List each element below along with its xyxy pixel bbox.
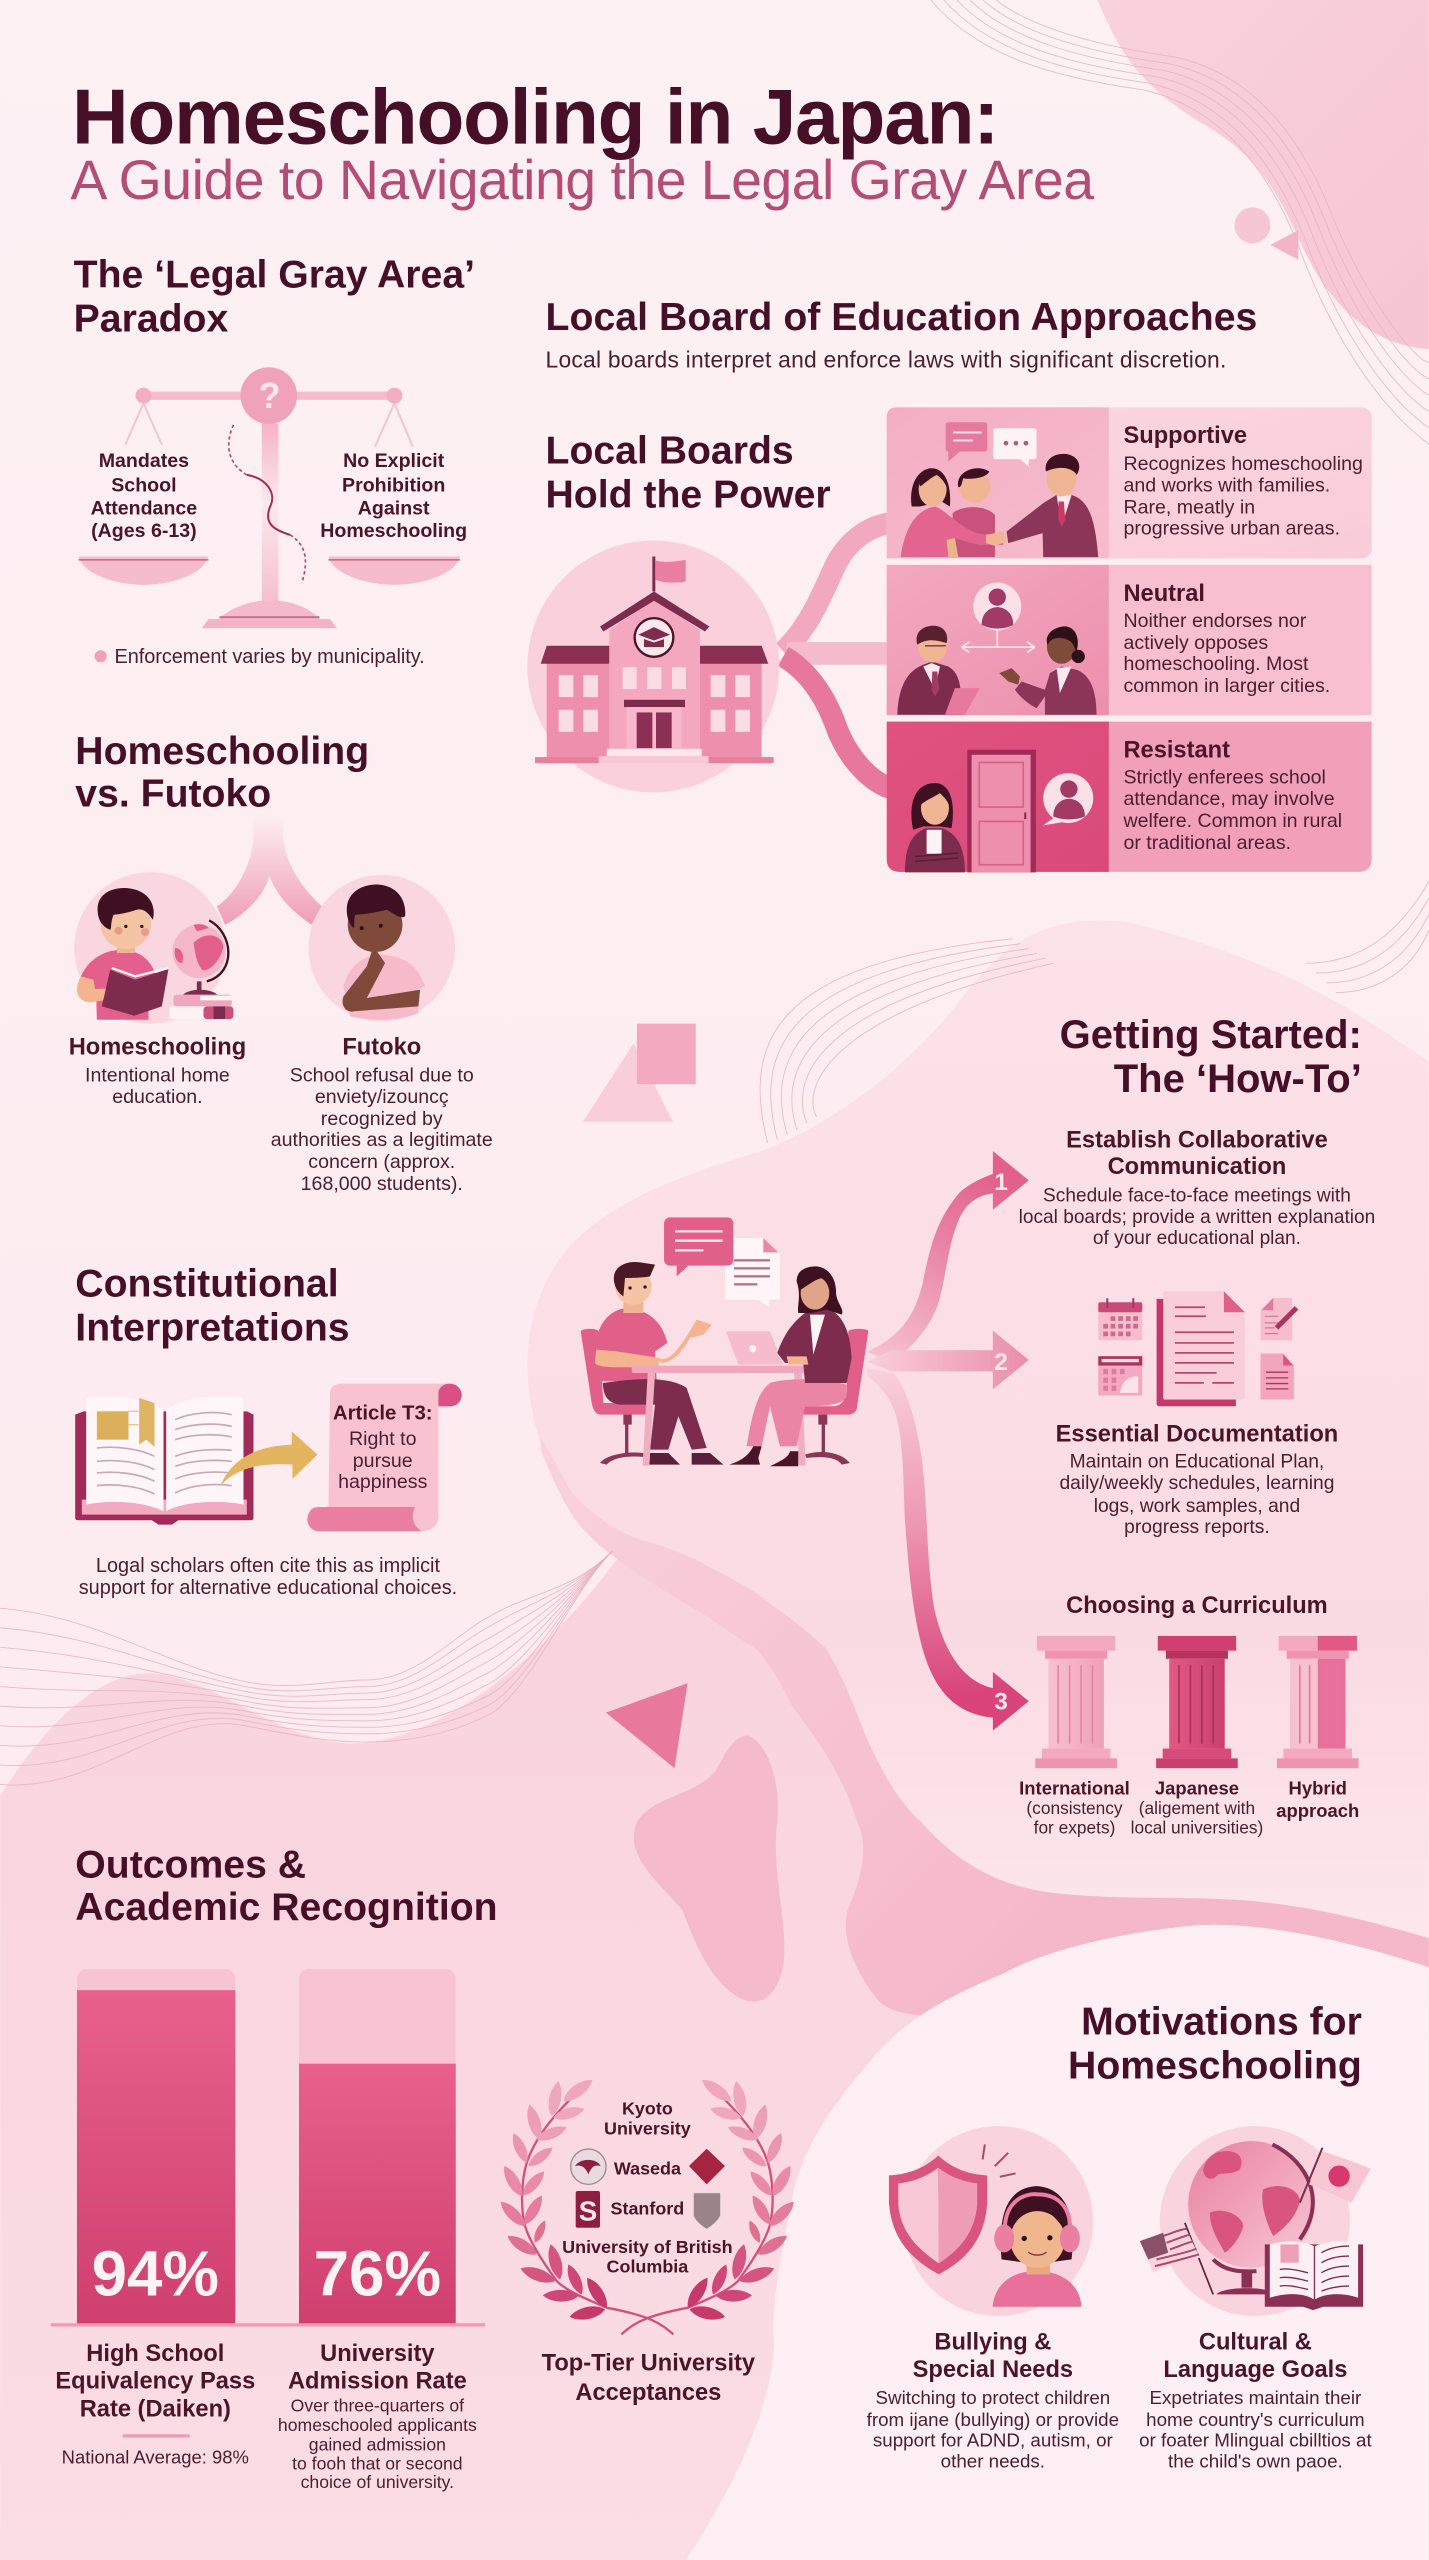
label: homeschooling: Homeschooling	[69, 1035, 246, 1061]
bar: high school equivalency 94%: 94%	[92, 2239, 219, 2310]
subheading text: Local boards interpret and enforce laws with significant discretion.	[546, 346, 1226, 372]
icon: shield and child with headphones	[889, 2126, 1093, 2316]
background: motivations white blob	[686, 1925, 1429, 2560]
text: neutral: Neutral	[1123, 581, 1205, 607]
text: scholars note: support for alternative educational choices.	[79, 1577, 457, 1599]
step 2 text: logs, work samples, and	[1094, 1496, 1300, 1517]
label: hybrid: Hybrid	[1289, 1777, 1347, 1798]
label: admission rate: gained admission	[309, 2435, 446, 2455]
panel: local board of education approaches	[527, 296, 1372, 872]
logo: shield	[693, 2193, 721, 2229]
label: equivalency pass rate: Rate (Daiken)	[80, 2396, 231, 2422]
label: japanese: Japanese	[1155, 1777, 1239, 1798]
pillar: international	[1035, 1636, 1117, 1768]
label: admission rate: to fooh that or second	[292, 2453, 463, 2473]
decorative shapes: circle and triangle	[1234, 207, 1298, 260]
note: enforcement: Enforcement varies by municipality.	[115, 646, 425, 668]
label: international: International	[1019, 1777, 1130, 1798]
label: hybrid: approach	[1276, 1800, 1359, 1821]
label: mandates: (Ages 6-13)	[91, 520, 197, 542]
scroll text: pursue	[353, 1450, 413, 1472]
heading: vs. Futoko	[75, 773, 271, 816]
label: futoko: authorities as a legitimate	[271, 1129, 493, 1151]
step 1 text: Schedule face-to-face meetings with	[1043, 1186, 1351, 1207]
arrow 1	[867, 1151, 1029, 1362]
label: admission rate: choice of university.	[301, 2472, 454, 2492]
label: admission rate: Admission Rate	[288, 2369, 467, 2395]
text: resistant: or traditional areas.	[1123, 832, 1291, 854]
laurel with universities: Columbia	[607, 2257, 689, 2277]
school with connectors	[527, 523, 890, 792]
label: international: (consistency	[1026, 1798, 1123, 1818]
step 1 text: local boards; provide a written explanation	[1019, 1207, 1375, 1228]
panel: outcomes and academic recognition	[51, 1844, 798, 2492]
label: bullying and special needs: Special Needs	[913, 2357, 1073, 2383]
laurel with universities: Kyoto	[622, 2098, 673, 2118]
title	[70, 73, 1094, 211]
label: equivalency pass rate: High School	[86, 2341, 224, 2367]
label: cultural and language goals: home country's curriculum	[1146, 2409, 1365, 2430]
scroll text: Article T3:	[333, 1403, 433, 1425]
text: supportive: Rare, meatly in	[1123, 496, 1255, 518]
background: middle blob	[528, 921, 1429, 1953]
decorative shapes: square and triangle	[583, 1024, 696, 1122]
illustration: closed door	[905, 750, 1093, 872]
text: resistant: Strictly enferees school	[1123, 767, 1326, 789]
panel: constitutional interpretations	[75, 1262, 462, 1599]
label: cultural and language goals: Expetriates maintain their	[1150, 2387, 1361, 2408]
laurel with universities: Stanford	[611, 2198, 684, 2218]
text: neutral: Noither endorses nor	[1123, 610, 1307, 632]
step 1 text: Communication	[1108, 1154, 1286, 1180]
text: supportive: Recognizes homeschooling	[1123, 453, 1363, 475]
text: supportive: and works with families.	[1123, 474, 1330, 496]
heading: local boards hold the power: Hold the Power	[546, 474, 831, 517]
label: cultural and language goals: or foater Mlingual cbilltios at	[1139, 2430, 1372, 2451]
connectors from school to cards	[783, 523, 890, 788]
icon: open book, arrow and scroll	[75, 1384, 462, 1531]
decorative shape: triangle	[606, 1683, 688, 1768]
heading: Paradox	[74, 297, 228, 340]
heading: Motivations for	[1081, 2000, 1362, 2043]
heading: Interpretations	[75, 1306, 350, 1349]
step 1 text: Establish Collaborative	[1066, 1128, 1328, 1154]
label: mandates: Mandates	[99, 450, 189, 472]
illustration: fork and children	[74, 816, 455, 1024]
laurel with universities: Waseda	[614, 2158, 682, 2178]
heading: Getting Started:	[1060, 1013, 1362, 1057]
illustration: parent meeting official	[581, 1217, 868, 1466]
arrow 3: 3	[994, 1688, 1008, 1715]
heading: Constitutional	[75, 1262, 339, 1305]
panel: motivations for homeschooling	[867, 2000, 1372, 2472]
label: no explicit prohibition: Prohibition	[342, 474, 445, 496]
icon: child with book and globe	[74, 872, 233, 1024]
icon group: documentation	[1098, 1291, 1297, 1406]
scroll text: Right to	[349, 1428, 417, 1450]
step 2 text: Essential Documentation	[1056, 1422, 1338, 1448]
heading: local boards hold the power: Local Boards	[546, 430, 794, 473]
pillar: japanese	[1156, 1636, 1238, 1768]
arrow 2	[867, 1331, 1029, 1389]
arrow 2: 2	[994, 1349, 1008, 1376]
background: small blob	[634, 1736, 784, 2001]
label: mandates: School	[111, 474, 177, 496]
text: scholars note: Logal scholars often cite this as implicit	[96, 1555, 440, 1577]
laurel with universities: University	[604, 2119, 691, 2139]
text: neutral: homeschooling. Most	[1123, 653, 1309, 675]
label: homeschooling: education.	[112, 1086, 203, 1108]
icon: balance scale	[79, 367, 460, 628]
label: cultural and language goals: the child's own paoe.	[1168, 2451, 1343, 2472]
scroll text: happiness	[338, 1471, 428, 1493]
label: cultural and language goals: Language Goals	[1163, 2357, 1347, 2383]
text: resistant: attendance, may involve	[1123, 788, 1335, 810]
label: homeschooling: Intentional home	[85, 1065, 230, 1087]
divider and national average	[62, 2434, 249, 2468]
text: supportive: progressive urban areas.	[1123, 518, 1340, 540]
label: no explicit prohibition: Against	[358, 497, 430, 519]
laurel with universities: University of British	[562, 2237, 733, 2257]
label: international: for expets)	[1034, 1817, 1115, 1837]
label: mandates: Attendance	[91, 497, 197, 519]
illustration: neutral officials	[897, 582, 1097, 715]
bar: university admission 76%	[299, 1969, 456, 2325]
connector: fork	[217, 816, 322, 925]
label: admission rate: homeschooled applicants	[278, 2415, 477, 2435]
card: resistant	[887, 722, 1372, 872]
label: futoko: 168,000 students).	[301, 1173, 463, 1195]
label: futoko: Futoko	[342, 1035, 421, 1061]
text: supportive: Supportive	[1123, 423, 1247, 449]
label: equivalency pass rate: Equivalency Pass	[55, 2369, 255, 2395]
step 2 text: Maintain on Educational Plan,	[1070, 1452, 1324, 1473]
label: bullying and special needs: other needs.	[941, 2451, 1045, 2472]
step 3 heading: Choosing a Curriculum	[1066, 1593, 1328, 1619]
label: admission rate: University	[320, 2341, 435, 2367]
label: japanese: (aligement with	[1139, 1798, 1255, 1818]
title: Homeschooling in Japan:	[72, 73, 999, 161]
label: futoko: concern (approx.	[308, 1151, 455, 1173]
background: dark swirl ribbon	[541, 1437, 1429, 2015]
logo: stanford s	[576, 2191, 600, 2228]
heading: Academic Recognition	[75, 1886, 498, 1929]
label: bullying and special needs: from ijane (bullying) or provide	[867, 2409, 1119, 2430]
card: supportive	[887, 407, 1372, 558]
decorative line waves	[0, 0, 1429, 1785]
background: lower pink field	[0, 1543, 1429, 2560]
label: bullying and special needs: Switching to protect children	[876, 2387, 1110, 2408]
icon: thinking child	[308, 875, 455, 1021]
label: futoko: recognized by	[321, 1108, 443, 1130]
label: no explicit prohibition: No Explicit	[343, 450, 445, 472]
bar: university admission 76%: 76%	[314, 2239, 441, 2310]
logo: waseda crest	[571, 2149, 606, 2184]
card: neutral	[887, 565, 1372, 715]
heading: Homeschooling	[75, 730, 369, 773]
label: no explicit prohibition: Homeschooling	[320, 520, 467, 542]
label: futoko: School refusal due to	[290, 1065, 474, 1087]
panel: homeschooling vs futoko	[69, 730, 493, 1195]
panel: getting started	[581, 1013, 1375, 1837]
step 2 text: daily/weekly schedules, learning	[1059, 1473, 1334, 1494]
illustration: family meeting official	[901, 422, 1098, 557]
divider and national average: National Average: 98%	[62, 2447, 249, 2468]
label: top-tier acceptances: Top-Tier University	[542, 2351, 756, 2377]
bar chart	[51, 1969, 485, 2327]
step 2 text: progress reports.	[1124, 1517, 1270, 1538]
background: top-right blob	[1097, 0, 1429, 349]
heading: Homeschooling	[1068, 2044, 1362, 2087]
arrow 1: 1	[994, 1169, 1008, 1196]
bar: high school equivalency 94%	[77, 1969, 235, 2325]
pillar: hybrid	[1277, 1636, 1359, 1768]
step 1 text: of your educational plan.	[1093, 1228, 1301, 1249]
laurel with universities	[497, 2075, 798, 2334]
label: top-tier acceptances: Acceptances	[575, 2380, 721, 2406]
label: admission rate: Over three-quarters of	[291, 2395, 464, 2415]
text: resistant: welfere. Common in rural	[1122, 810, 1342, 832]
label: bullying and special needs: Bullying &	[934, 2329, 1051, 2355]
text: neutral: common in larger cities.	[1123, 675, 1330, 697]
arrow 3	[867, 1368, 1029, 1731]
heading: Local Board of Education Approaches	[546, 296, 1257, 339]
icon: globe, flags and book	[1140, 2126, 1371, 2316]
panel: legal gray area paradox	[74, 253, 475, 668]
text: resistant: Resistant	[1123, 738, 1230, 764]
label: bullying and special needs: support for ADND, autism, or	[873, 2430, 1113, 2451]
logo: red diamond	[689, 2149, 725, 2184]
text: neutral: actively opposes	[1123, 632, 1268, 654]
label: japanese: local universities)	[1131, 1817, 1263, 1837]
heading: The ‘Legal Gray Area’	[74, 253, 475, 296]
label: futoko: enviety/izouncç	[315, 1086, 449, 1108]
heading: The ‘How-To’	[1114, 1057, 1362, 1101]
label: cultural and language goals: Cultural &	[1199, 2329, 1312, 2355]
heading: Outcomes &	[75, 1844, 306, 1887]
subtitle: A Guide to Navigating the Legal Gray Area	[70, 149, 1094, 211]
laurel with universities: S	[579, 2195, 597, 2226]
scale question mark: ?	[259, 375, 281, 416]
